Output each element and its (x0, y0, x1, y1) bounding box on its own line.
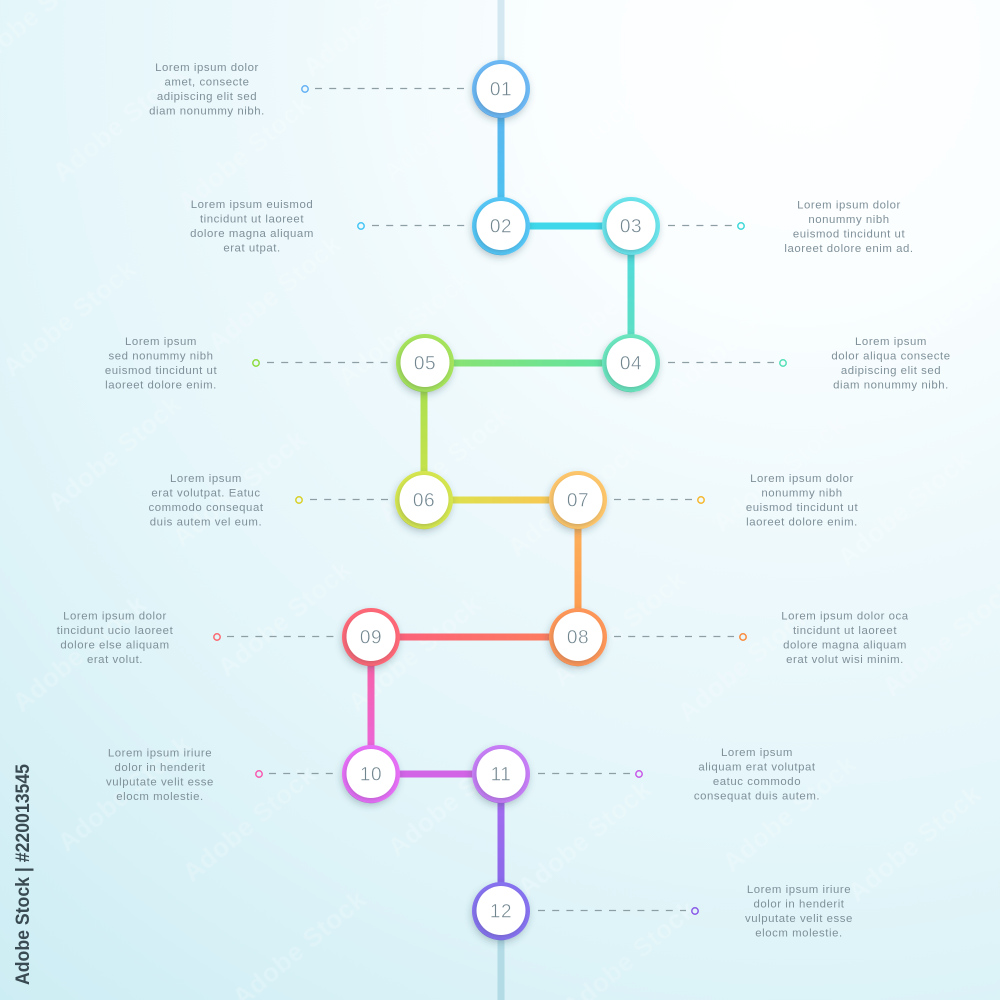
step 01: diam nonummy nibh. (149, 106, 265, 118)
step 04: dolor aliqua consecte (831, 350, 951, 362)
watermark: Adobe Stock (547, 564, 692, 692)
step 07: nonummy nibh (761, 488, 843, 500)
watermark: Adobe Stock (382, 734, 527, 862)
step 12: 12 (490, 902, 512, 922)
step 03: laoreet dolore enim ad. (784, 243, 914, 255)
step 02: tincidunt ut laoreet (200, 214, 304, 226)
step 04: adipiscing elit sed (841, 365, 941, 377)
step 06 (148, 471, 453, 529)
watermark: Adobe Stock (707, 409, 852, 537)
step 09: erat volut. (87, 654, 143, 666)
step 06: commodo consequat (148, 502, 264, 514)
step 11: aliquam erat volutpat (698, 762, 816, 774)
step 03: euismod tincidunt ut (793, 228, 905, 240)
step 07: laoreet dolore enim. (746, 516, 858, 528)
watermark: Adobe Stock (662, 274, 807, 402)
step 02: erat utpat. (223, 242, 281, 254)
step 09: tincidunt ucio laoreet (57, 625, 174, 637)
watermark: Adobe Stock (7, 589, 152, 717)
step 12: vulputate velit esse (745, 913, 853, 925)
step 07: euismod tincidunt ut (746, 502, 858, 514)
step 07: Lorem ipsum dolor (750, 473, 854, 485)
watermark: Adobe Stock (172, 89, 317, 217)
step 11: Lorem ipsum (721, 747, 793, 759)
step 03: Lorem ipsum dolor (797, 200, 901, 212)
step 11: 11 (491, 764, 511, 786)
watermark: Adobe Stock (47, 59, 192, 187)
step 05: 05 (414, 354, 436, 374)
step 08: dolore magna aliquam (783, 640, 907, 652)
watermark: Adobe Stock (377, 59, 522, 187)
step 03 (602, 197, 914, 255)
step 06: Lorem ipsum (170, 473, 242, 485)
step 08: erat volut wisi minim. (786, 654, 904, 666)
step 01 (149, 60, 530, 118)
watermark: Adobe Stock (542, 239, 687, 367)
watermark: Adobe Stock (497, 89, 642, 217)
step 04 (602, 334, 951, 392)
step 10: vulputate velit esse (106, 776, 214, 788)
watermark: Adobe Stock (712, 74, 857, 202)
step 09: dolore else aliquam (60, 640, 170, 652)
step 01: Lorem ipsum dolor (155, 62, 259, 74)
watermark: Adobe Stock (672, 599, 817, 727)
step 12: dolor in henderit (753, 898, 845, 910)
stock id label: Adobe Stock | #220013545 (12, 764, 34, 985)
watermark: Adobe Stock (0, 254, 142, 382)
step 01: amet, consecte (165, 76, 249, 88)
step 01: 01 (490, 80, 512, 100)
watermark: Adobe Stock (332, 264, 477, 392)
step 12: elocm molestie. (755, 928, 843, 940)
step 10 (106, 745, 400, 803)
step 10: Lorem ipsum iriure (108, 748, 212, 760)
step 05: euismod tincidunt ut (105, 365, 217, 377)
step 08: tincidunt ut laoreet (793, 625, 897, 637)
watermark: Adobe Stock (212, 554, 357, 682)
step 02: 02 (490, 216, 512, 238)
step 04: 04 (620, 354, 642, 374)
watermark: Adobe Stock (52, 729, 197, 857)
step 09: 09 (360, 628, 382, 648)
watermark: Adobe Stock (202, 229, 347, 357)
step 02: Lorem ipsum euismod (191, 199, 313, 211)
central vertical track top (498, 0, 504, 70)
watermark: Adobe Stock (177, 759, 322, 887)
step 09: Lorem ipsum dolor (63, 610, 167, 622)
step 07: 07 (567, 490, 589, 512)
step 10: dolor in henderit (114, 762, 206, 774)
step 05: Lorem ipsum (125, 336, 197, 348)
step 06: erat volutpat. Eatuc (151, 488, 261, 500)
step 02 (190, 197, 530, 255)
step 05: sed nonummy nibh (108, 350, 214, 362)
watermark: Adobe Stock (167, 424, 312, 552)
watermark: Adobe Stock (372, 399, 517, 527)
step 06: duis autem vel eum. (150, 516, 262, 528)
step 12 (472, 882, 853, 940)
step 08: 08 (567, 628, 589, 648)
step 10: 10 (360, 764, 382, 786)
step 04: Lorem ipsum (855, 336, 927, 348)
step 06: 06 (413, 490, 435, 512)
step 11: eatuc commodo (713, 776, 801, 788)
step 11: consequat duis autem. (694, 790, 820, 802)
step 09 (57, 608, 400, 666)
step 12: Lorem ipsum iriure (747, 884, 851, 896)
watermark: Adobe Stock (832, 444, 977, 572)
step 08: Lorem ipsum dolor oca (781, 610, 909, 622)
step 04: diam nonummy nibh. (833, 380, 949, 392)
step 03: 03 (620, 216, 642, 238)
watermark: Adobe Stock (832, 99, 977, 227)
watermark: Adobe Stock (717, 749, 862, 877)
watermark: Adobe Stock (512, 774, 657, 902)
step 05: laoreet dolore enim. (105, 380, 217, 392)
step 07 (549, 471, 858, 529)
connector lines (368, 100, 634, 895)
step 02: dolore magna aliquam (190, 228, 314, 240)
central vertical track bottom (498, 930, 504, 1000)
watermark: Adobe Stock (342, 589, 487, 717)
watermark: Adobe Stock (42, 389, 187, 517)
step 03: nonummy nibh (808, 214, 890, 226)
step 01: adipiscing elit sed (157, 91, 257, 103)
step 11 (472, 745, 820, 803)
watermark: Adobe Stock (502, 434, 647, 562)
step 05 (105, 334, 454, 392)
step 08 (549, 608, 909, 666)
watermark: Adobe Stock (842, 779, 987, 907)
step 10: elocm molestie. (116, 791, 204, 803)
